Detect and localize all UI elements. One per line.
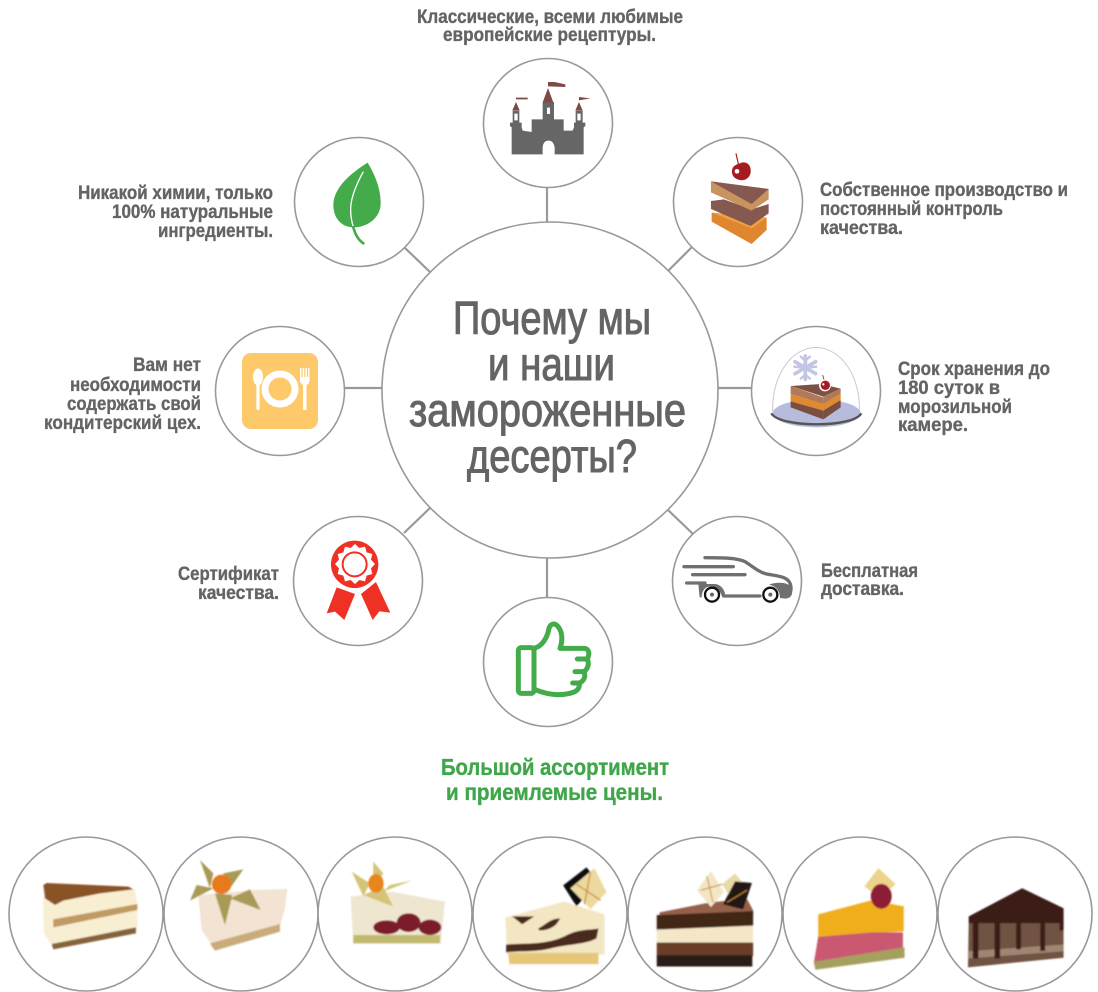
icon: layered cake with cherry <box>711 153 769 244</box>
circle: thumb <box>484 598 612 726</box>
icon: plate and cutlery <box>242 353 318 429</box>
text: natural ingredients: Никакой химии, только <box>78 183 273 204</box>
text: no pastry shop <box>44 355 201 434</box>
heading: assortment and prices: Большой ассортимент <box>441 754 669 780</box>
text: own production <box>820 180 1068 239</box>
text: shelf life: 180 суток в <box>898 378 1000 399</box>
dessert 3: cherry cheesecake <box>351 862 445 943</box>
icon: red rosette <box>327 539 390 620</box>
circle: dessert 4 <box>473 837 627 991</box>
icon: thumbs up <box>518 624 589 695</box>
panel: no pastry shop <box>44 326 344 456</box>
dessert 6: mango berry mousse <box>814 868 905 970</box>
circle: castle <box>484 58 612 188</box>
circle: plate <box>216 326 344 456</box>
title: десерты? <box>467 430 637 482</box>
heading: assortment and prices <box>441 754 669 805</box>
panel: shelf life <box>752 326 1050 456</box>
text: no pastry shop: Вам нет <box>133 355 201 376</box>
panel: dessert row <box>9 837 1092 991</box>
text: natural ingredients: 100% натуральные <box>112 202 273 223</box>
text: european recipes <box>417 7 683 46</box>
circle: dessert 5 <box>628 837 782 991</box>
circle: leaf <box>294 138 424 266</box>
panel: quality certificate <box>178 516 422 646</box>
connector lines <box>345 188 752 597</box>
text: own production: Собственное производство и <box>820 180 1068 201</box>
text: own production: качества. <box>820 218 903 239</box>
text: no pastry shop: содержать свой <box>67 394 201 415</box>
dessert 5: chocolate mousse <box>657 871 753 967</box>
text: own production: постоянный контроль <box>820 199 1003 220</box>
text: european recipes: Классические, всеми любимые <box>417 7 683 28</box>
circle: dome <box>752 326 880 456</box>
circle: dessert 7 <box>938 837 1092 991</box>
circle: dessert 2 <box>164 837 318 991</box>
title <box>409 292 686 482</box>
icon: speeding car <box>684 558 792 602</box>
title: и наши <box>488 338 615 390</box>
heading: assortment and prices: и приемлемые цены. <box>446 779 663 805</box>
icon: castle <box>510 82 590 154</box>
text: shelf life: морозильной <box>898 397 1012 418</box>
text: natural ingredients: ингредиенты. <box>158 221 273 242</box>
dessert 7: chocolate cake <box>968 888 1064 967</box>
panel: natural ingredients <box>78 138 424 266</box>
icon: cake under frozen dome <box>771 347 861 427</box>
title: замороженные <box>409 384 686 436</box>
circle: layered cake <box>674 138 802 266</box>
circle: dessert 3 <box>318 837 472 991</box>
text: natural ingredients <box>78 183 273 242</box>
text: no pastry shop: необходимости <box>70 375 201 396</box>
text: free delivery: доставка. <box>821 579 904 600</box>
text: no pastry shop: кондитерский цех. <box>44 413 201 434</box>
text: shelf life: камере. <box>898 415 968 436</box>
circle: dessert 1 <box>9 837 163 991</box>
central circle with title <box>382 222 718 558</box>
text: european recipes: европейские рецептуры. <box>443 25 656 46</box>
circle: dessert 6 <box>783 837 937 991</box>
dessert 1: tiramisu <box>43 883 137 949</box>
text: shelf life <box>898 359 1050 436</box>
dessert 4: marble cheesecake <box>505 867 607 964</box>
text: free delivery: Бесплатная <box>821 561 918 582</box>
panel: european recipes <box>417 7 683 188</box>
snowflake <box>794 356 816 379</box>
text: free delivery <box>821 561 918 600</box>
text: quality certificate <box>178 564 279 604</box>
dessert 2: physalis cheesecake <box>190 860 287 951</box>
panel: assortment and prices <box>441 598 669 805</box>
text: quality certificate: качества. <box>198 583 279 604</box>
panel: own production <box>674 138 1068 266</box>
title: Почему мы <box>453 292 651 344</box>
text: shelf life: Срок хранения до <box>898 359 1050 380</box>
text: quality certificate: Сертификат <box>178 564 279 585</box>
panel: free delivery <box>672 516 918 646</box>
circle: car <box>672 516 802 646</box>
icon: green leaf <box>333 163 381 243</box>
circle: rosette <box>294 516 422 646</box>
